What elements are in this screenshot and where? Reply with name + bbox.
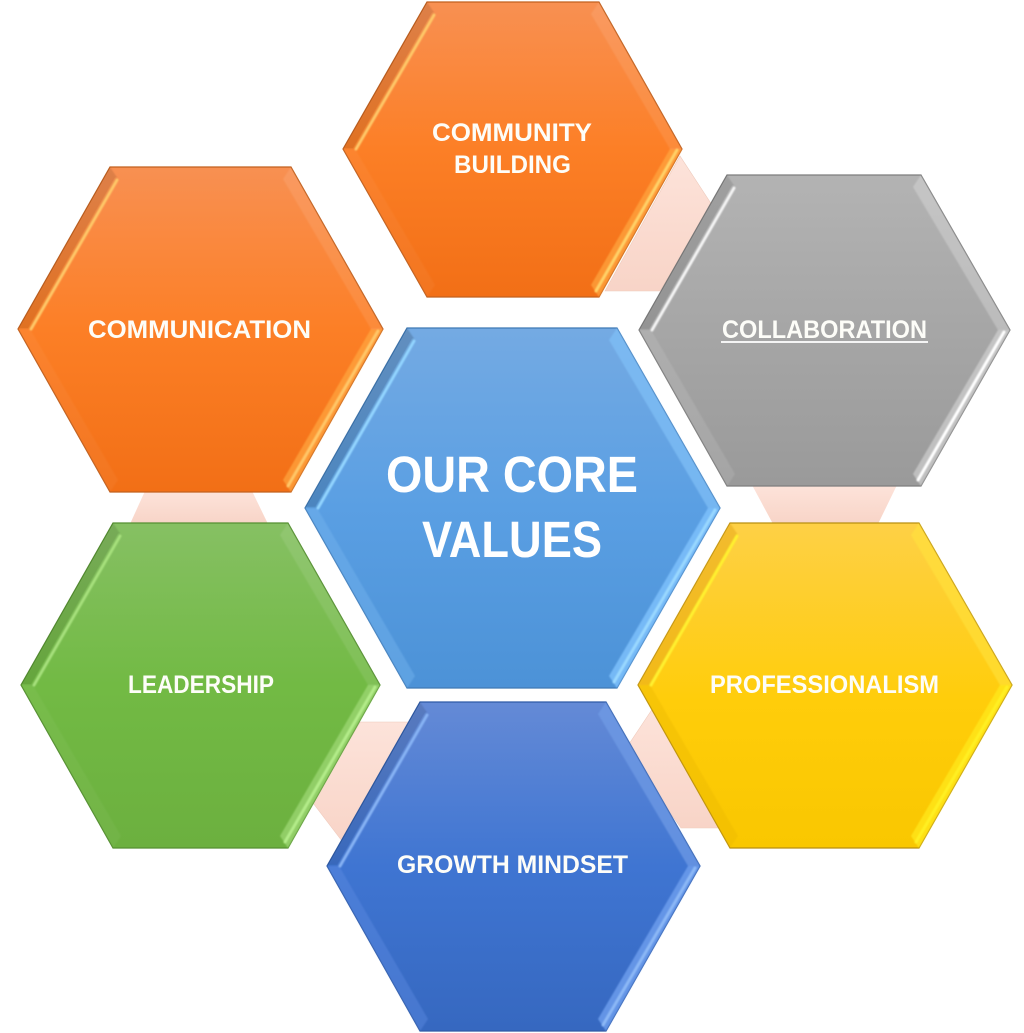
title: our core values: OUR CORE — [386, 446, 638, 503]
connector: professionalism to growth mindset — [625, 705, 725, 828]
connector: leadership to communication — [130, 491, 268, 524]
connector: growth mindset to leadership — [313, 722, 410, 845]
hexagon: professionalism — [638, 523, 1012, 848]
bevel: our core values center — [305, 328, 720, 688]
title: our core values — [386, 446, 638, 568]
hexagon: collaboration — [639, 175, 1010, 486]
label: collaboration: COLLABORATION — [722, 316, 927, 344]
bevel: communication — [18, 167, 383, 492]
bevel: professionalism — [638, 523, 1012, 848]
label: community building: COMMUNITY — [432, 119, 592, 147]
label: communication: COMMUNICATION — [88, 316, 311, 344]
connector: collaboration to professionalism — [752, 485, 897, 524]
label: growth mindset: GROWTH MINDSET — [397, 851, 628, 879]
label: professionalism: PROFESSIONALISM — [710, 671, 939, 699]
title: our core values: VALUES — [422, 511, 602, 568]
bevel: collaboration — [639, 175, 1010, 486]
bevel: community building — [343, 2, 682, 297]
hexagon: leadership — [21, 523, 380, 848]
hexagon: communication — [18, 167, 383, 492]
label: leadership: LEADERSHIP — [128, 671, 274, 699]
hexagon: our core values center — [305, 328, 720, 688]
bevel: leadership — [21, 523, 380, 848]
bevel: growth mindset — [327, 702, 700, 1031]
label: community building: BUILDING — [454, 151, 571, 179]
hexagon: community building — [343, 2, 682, 297]
hexagon: growth mindset — [327, 702, 700, 1031]
label: community building — [432, 119, 592, 179]
connector: community building to collaboration — [605, 156, 712, 291]
